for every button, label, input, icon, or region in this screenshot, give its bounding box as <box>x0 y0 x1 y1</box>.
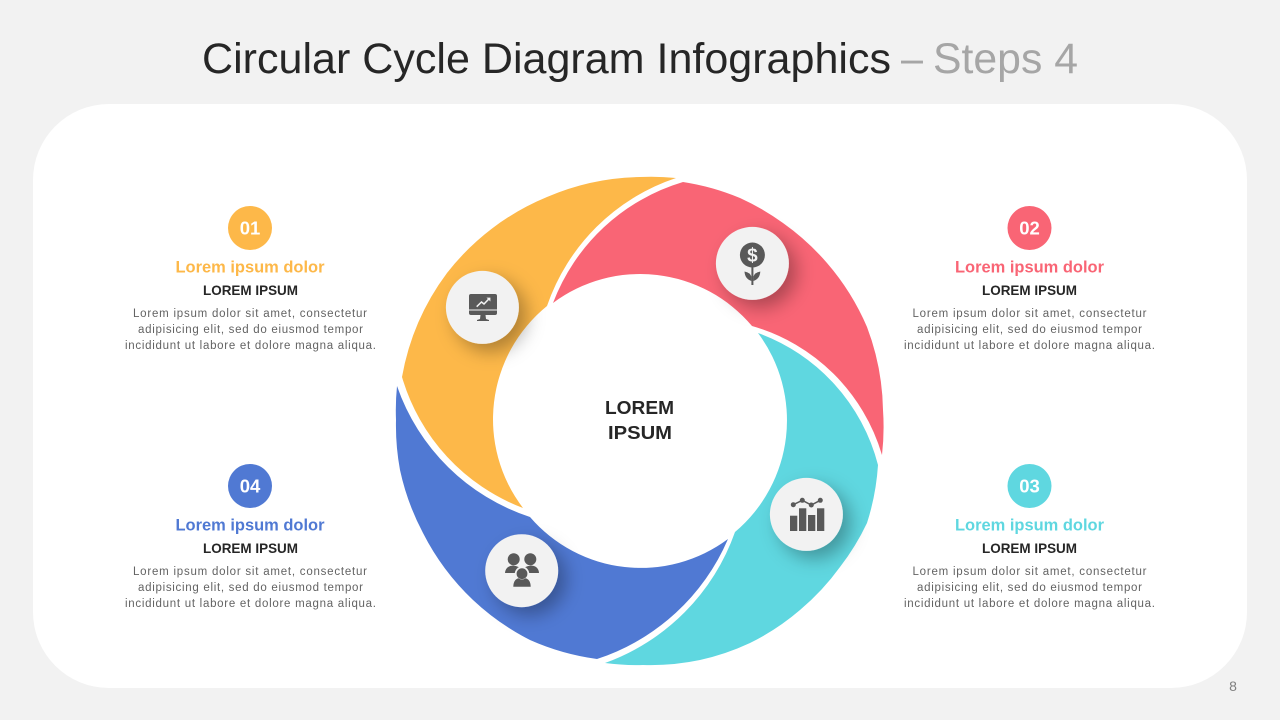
icon badge: bar chart with line <box>770 478 843 551</box>
body 04: Lorem ipsum dolor sit amet, consectetur <box>133 566 367 578</box>
number badge 04: 04 <box>240 476 261 496</box>
body 04 <box>125 566 376 610</box>
body 01 <box>125 308 376 352</box>
step 04 text block <box>125 464 376 610</box>
panel: white background card <box>33 104 1247 688</box>
body 01: incididunt ut labore et dolore magna aliqua. <box>125 340 376 352</box>
number badge 01: 01 <box>240 218 260 238</box>
center label: IPSUM <box>608 422 672 443</box>
body 02: adipisicing elit, sed do eiusmod tempor <box>917 324 1142 336</box>
heading 03: Lorem ipsum dolor <box>955 516 1105 534</box>
number badge 02 <box>1008 206 1052 250</box>
segment 1: orange <box>402 177 676 508</box>
subheading 01: LOREM IPSUM <box>203 282 298 298</box>
body 01: Lorem ipsum dolor sit amet, consectetur <box>133 308 367 320</box>
subheading 04: LOREM IPSUM <box>203 540 298 556</box>
subheading 03: LOREM IPSUM <box>982 540 1077 556</box>
heading 01: Lorem ipsum dolor <box>176 258 325 276</box>
number badge 02: 02 <box>1019 218 1040 238</box>
icon badge: money plant: $ <box>747 246 758 266</box>
number badge 03: 03 <box>1019 476 1040 496</box>
segment 2: red <box>553 182 884 455</box>
icon badge: people group <box>485 534 558 607</box>
center label: LOREM <box>605 397 674 418</box>
number badge 01 <box>228 206 272 250</box>
segment 4: blue <box>396 386 728 659</box>
title: Steps 4 <box>933 35 1078 83</box>
body 01: adipisicing elit, sed do eiusmod tempor <box>138 324 363 336</box>
body 03 <box>904 566 1155 610</box>
body 02: incididunt ut labore et dolore magna aliqua. <box>904 340 1155 352</box>
body 02 <box>904 308 1155 352</box>
step 03 text block <box>904 464 1155 610</box>
number badge 04 <box>228 464 272 508</box>
segment 3: teal <box>605 333 878 665</box>
icon badge: monitor with chart <box>446 271 519 344</box>
body 04: incididunt ut labore et dolore magna aliqua. <box>125 598 376 610</box>
icon badge: money plant <box>716 227 789 300</box>
page number: 8 <box>1229 678 1237 694</box>
body 03: incididunt ut labore et dolore magna aliqua. <box>904 598 1155 610</box>
title: – <box>901 35 923 83</box>
heading 02: Lorem ipsum dolor <box>955 258 1105 276</box>
body 03: Lorem ipsum dolor sit amet, consectetur <box>912 566 1147 578</box>
center label <box>605 397 674 443</box>
body 04: adipisicing elit, sed do eiusmod tempor <box>138 582 363 594</box>
cycle diagram <box>396 177 884 665</box>
body 02: Lorem ipsum dolor sit amet, consectetur <box>912 308 1147 320</box>
body 03: adipisicing elit, sed do eiusmod tempor <box>917 582 1142 594</box>
step 01 text block <box>125 206 376 352</box>
subheading 02: LOREM IPSUM <box>982 282 1077 298</box>
step 02 text block <box>904 206 1155 352</box>
heading 04: Lorem ipsum dolor <box>176 516 325 534</box>
number badge 03 <box>1008 464 1052 508</box>
title: Circular Cycle Diagram Infographics <box>202 35 891 83</box>
